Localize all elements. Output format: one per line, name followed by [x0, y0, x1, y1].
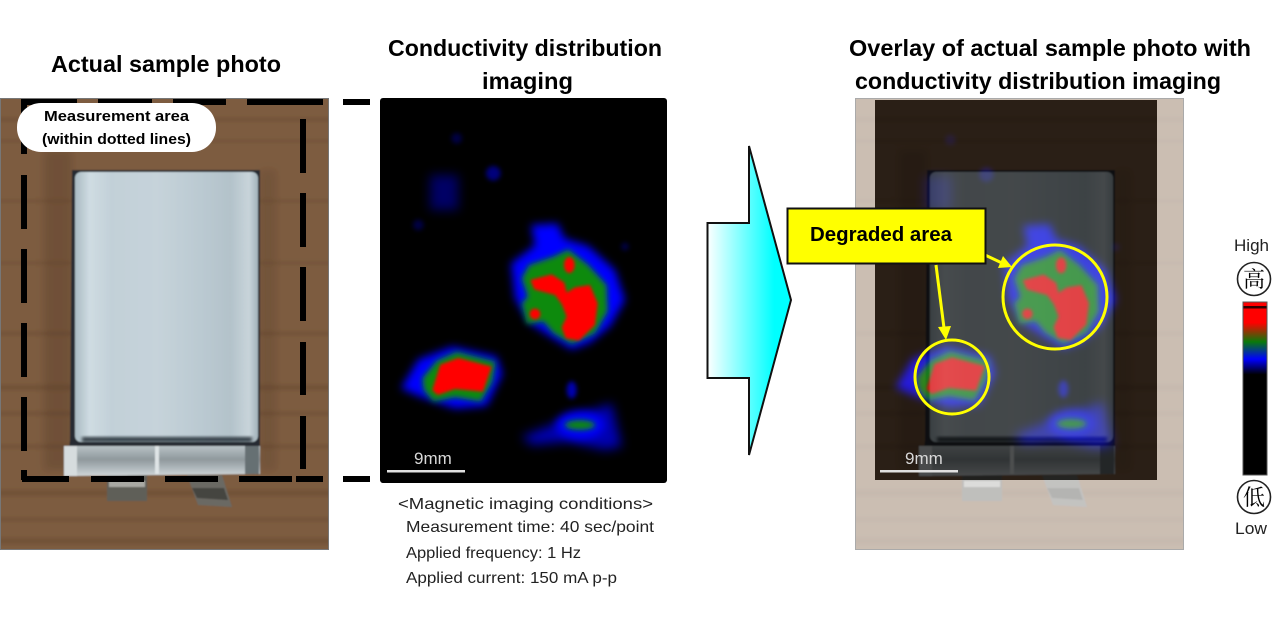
circle: large degraded area — [1003, 245, 1107, 349]
callout: measurement area — [17, 103, 216, 152]
callout: measurement area: (within dotted lines) — [42, 131, 191, 148]
panel: actual sample photo — [0, 51, 370, 554]
icon: high kanji: 高 — [1243, 267, 1265, 292]
measurement area dashed outline — [21, 99, 370, 482]
sample photo of battery on wood — [0, 93, 333, 554]
panel: conductivity distribution imaging — [380, 35, 667, 587]
heading: conductivity distribution imaging — [388, 35, 662, 94]
icon: high kanji — [1238, 262, 1270, 296]
text block: magnetic imaging conditions: Applied frequency: 1 Hz — [406, 545, 581, 562]
legend: conductivity colour scale — [1234, 236, 1270, 538]
label: high: High — [1234, 236, 1269, 255]
text block: magnetic imaging conditions — [398, 496, 655, 587]
scale bar: 9mm: 9mm — [414, 449, 452, 468]
circle: small degraded area — [915, 340, 989, 414]
heading: overlay: conductivity distribution imaging — [855, 68, 1221, 94]
scale bar: 9mm — [387, 449, 465, 472]
text block: magnetic imaging conditions: Applied current: 150 mA p-p — [406, 570, 617, 587]
label: low: Low — [1235, 519, 1268, 538]
overlay image — [850, 93, 1188, 554]
panel: overlay of photo and imaging — [788, 35, 1251, 554]
text block: magnetic imaging conditions: <Magnetic imaging conditions> — [398, 496, 653, 513]
conductivity heat map — [380, 98, 667, 483]
heading: overlay — [849, 35, 1251, 94]
callout: degraded area — [788, 208, 986, 264]
arrow: to large degraded area — [985, 255, 1012, 268]
arrow: cyan gradient block arrow — [708, 146, 791, 455]
scale bar: 9mm overlay: 9mm — [905, 449, 943, 468]
icon: low kanji: 低 — [1243, 485, 1265, 510]
photo border — [0, 98, 328, 550]
callout: degraded area: Degraded area — [810, 224, 953, 246]
arrow: to small degraded area — [936, 265, 951, 340]
icon: low kanji — [1238, 480, 1270, 514]
colour bar — [1243, 302, 1267, 475]
heading: overlay: Overlay of actual sample photo with — [849, 35, 1251, 61]
heading: conductivity distribution imaging: Conductivity distribution — [388, 35, 662, 61]
scale bar: 9mm overlay — [880, 449, 958, 472]
callout: measurement area: Measurement area — [44, 108, 190, 125]
heading: actual sample photo: Actual sample photo — [51, 51, 281, 77]
text block: magnetic imaging conditions: Measurement time: 40 sec/point — [406, 519, 655, 536]
heading: conductivity distribution imaging: imaging — [482, 68, 573, 94]
